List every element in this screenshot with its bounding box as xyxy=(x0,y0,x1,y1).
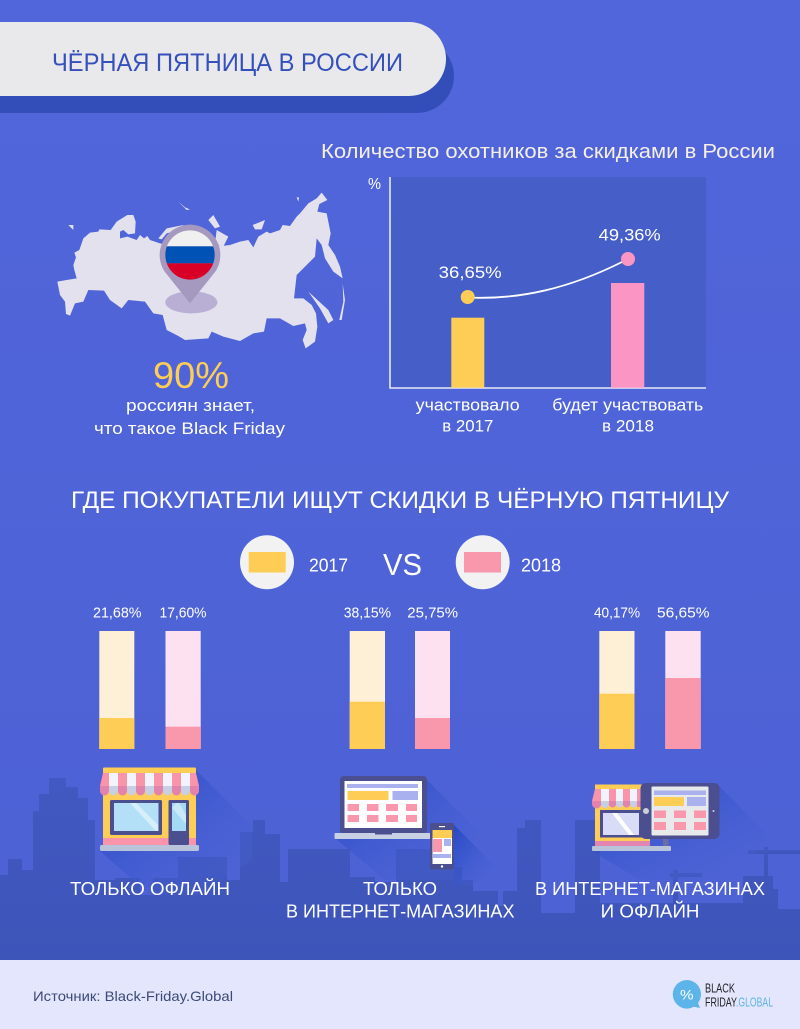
section heading: ГДЕ ПОКУПАТЕЛИ ИЩУТ СКИДКИ В ЧЁРНУЮ ПЯТНИЦУ xyxy=(71,487,729,514)
bars: online only xyxy=(344,604,458,749)
bars: offline only: 21,68% xyxy=(93,604,142,621)
bar chart: shoppers in Russia: в 2017 xyxy=(442,417,493,436)
label: online and offline: И ОФЛАЙН xyxy=(601,901,700,922)
bars: online and offline xyxy=(594,604,710,749)
label: online only: В ИНТЕРНЕТ-МАГАЗИНАХ xyxy=(286,902,514,922)
flag circle xyxy=(165,230,215,280)
logo: .GLOBAL xyxy=(736,995,773,1010)
icon: store and tablet xyxy=(592,783,770,880)
label: online and offline xyxy=(535,879,765,922)
bars: online and offline: 40,17% xyxy=(594,604,640,621)
bars: online and offline: 56,65% xyxy=(657,604,710,621)
bars: offline only xyxy=(93,604,206,749)
legend: 2018 xyxy=(521,555,561,575)
bar chart: shoppers in Russia: 36,65% xyxy=(439,263,502,282)
awareness statistic: что такое Black Friday xyxy=(94,419,286,438)
label: offline only: ТОЛЬКО ОФЛАЙН xyxy=(70,878,230,899)
awareness statistic: россиян знает, xyxy=(126,396,255,415)
icon: store xyxy=(100,768,252,895)
legend xyxy=(240,535,561,589)
logo: BLACK xyxy=(705,981,735,996)
legend: 2017 xyxy=(309,555,348,575)
footer xyxy=(0,960,800,1029)
pin body xyxy=(160,225,220,303)
bar chart: shoppers in Russia: в 2018 xyxy=(602,417,654,436)
bar chart: shoppers in Russia: 49,36% xyxy=(599,226,661,245)
awareness statistic: 90% xyxy=(153,355,229,396)
awareness statistic xyxy=(94,355,286,438)
bar chart: shoppers in Russia xyxy=(368,176,706,436)
source: Источник: Black-Friday.Global xyxy=(33,988,233,1004)
label: online and offline: В ИНТЕРНЕТ-МАГАЗИНАХ xyxy=(535,879,765,899)
label: online only xyxy=(286,879,514,922)
legend: VS xyxy=(383,547,422,582)
city skyline background xyxy=(0,778,800,960)
bar chart: shoppers in Russia: участвовало xyxy=(416,396,520,415)
bar chart: shoppers in Russia: будет участвовать xyxy=(552,396,703,415)
chart title: Количество охотников за скидками в России xyxy=(321,141,775,163)
bar chart: shoppers in Russia: % xyxy=(368,176,381,193)
title banner xyxy=(0,22,454,113)
logo: % xyxy=(680,986,694,1002)
logo: FRIDAY xyxy=(705,995,737,1010)
bars: offline only: 17,60% xyxy=(160,604,206,621)
pin shadow xyxy=(165,291,217,313)
map of Russia with pin xyxy=(57,193,345,348)
icon: laptop and phone xyxy=(334,776,500,885)
bars: online only: 25,75% xyxy=(407,604,458,621)
label: online only: ТОЛЬКО xyxy=(363,879,437,899)
bar 2017 xyxy=(451,318,484,388)
trend curve xyxy=(468,262,622,298)
logo xyxy=(673,980,773,1010)
bars: online only: 38,15% xyxy=(344,604,391,621)
title: ЧЁРНАЯ ПЯТНИЦА В РОССИИ xyxy=(52,49,403,77)
bar 2018 xyxy=(611,283,644,388)
